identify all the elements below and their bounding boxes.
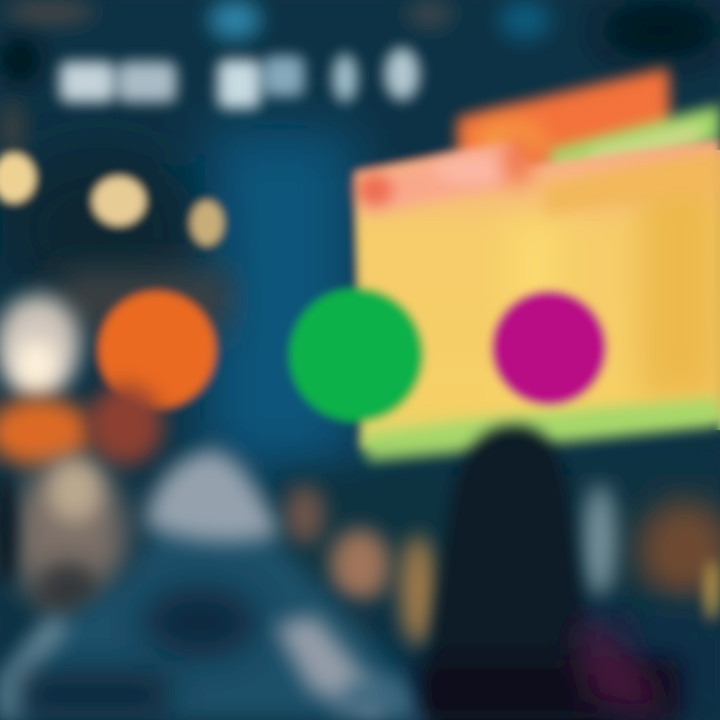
grey hood [145,450,280,542]
heading: blurred title text [60,48,419,108]
crowd [0,425,720,720]
orange back tab [458,68,670,210]
left person [8,463,128,607]
light 1 [0,153,36,203]
background heads [280,475,720,595]
white glow [0,295,80,395]
hooded person jacket [0,520,430,720]
green circle [289,288,423,422]
jacket dark lower [20,670,170,720]
long-haired person [429,425,600,720]
yellow board body [355,140,720,448]
hood interior [142,586,258,658]
orange circle [98,291,216,409]
grey shoulder [275,615,385,720]
green bottom strip [362,398,720,462]
green tab [550,105,720,190]
light 3 [190,200,224,246]
ceiling lights [0,153,224,246]
pink top strip [362,150,510,215]
maroon shoulder [575,615,665,720]
magenta circle [492,291,606,405]
orange glow [0,385,163,466]
display board [355,68,720,462]
light 2 [92,176,146,226]
